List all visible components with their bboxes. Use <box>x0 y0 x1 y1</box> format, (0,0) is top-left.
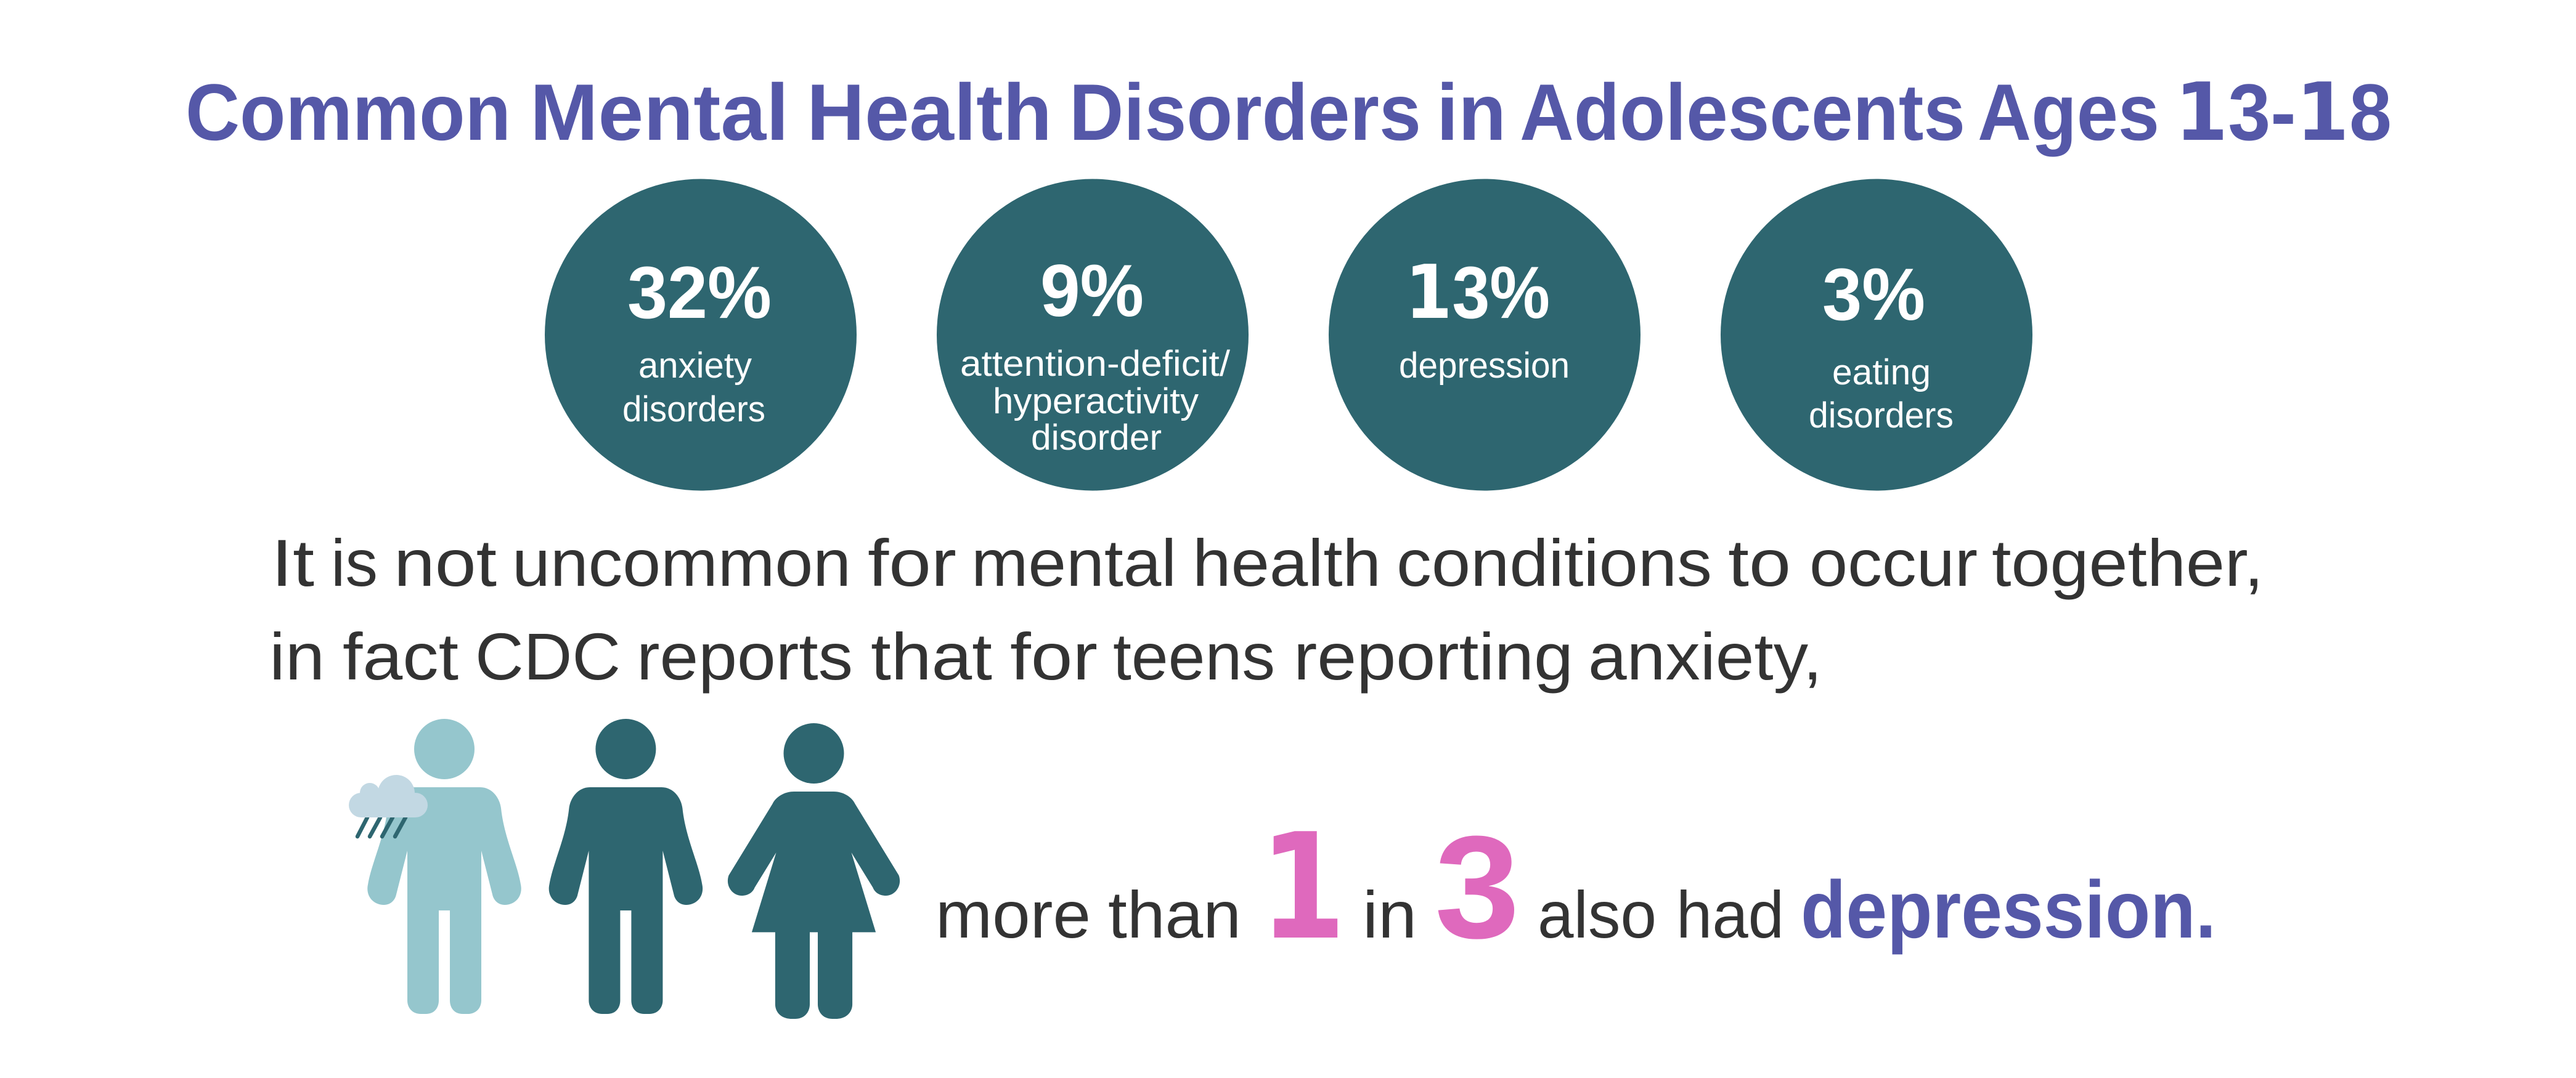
stat: 13% depression <box>1329 179 1641 490</box>
label: disorder <box>1031 418 1162 458</box>
figure: woman <box>728 723 900 1019</box>
value: 13% <box>1405 250 1550 336</box>
icon: rain cloud <box>349 775 428 837</box>
body text: health <box>1192 525 1381 600</box>
title: Mental <box>530 67 789 157</box>
body text: anxiety, <box>1588 619 1822 694</box>
body text: It <box>271 525 314 600</box>
label: anxiety <box>638 346 752 386</box>
title: 13-18 <box>2175 65 2392 159</box>
body text: CDC <box>475 619 621 694</box>
big number 3: 3 <box>1435 806 1520 969</box>
callout: more than 1 in 3 also had depression: in <box>1363 877 1417 952</box>
value: 3% <box>1822 253 1925 336</box>
callout: more than 1 in 3 also had depression <box>935 802 2216 972</box>
label: hyperactivity <box>993 381 1199 421</box>
stat: 3% eating disorders <box>1721 179 2032 490</box>
title: Ages <box>1978 67 2159 157</box>
callout: more than 1 in 3 also had depression: than <box>1108 877 1241 952</box>
label <box>960 344 1231 458</box>
label: attention-deficit/ <box>960 344 1231 384</box>
body text: to <box>1728 525 1791 600</box>
title: Disorders <box>1069 67 1421 157</box>
stat: 9% ADHD <box>937 179 1249 490</box>
circle <box>1329 179 1641 490</box>
label: disorders <box>622 389 765 429</box>
label: depression <box>1399 346 1570 386</box>
body text: reporting <box>1294 619 1573 694</box>
callout: more than 1 in 3 also had depression: had <box>1676 877 1784 952</box>
circle <box>1721 179 2032 490</box>
body text <box>269 525 2264 694</box>
label <box>622 346 765 429</box>
title <box>185 65 2392 159</box>
value: 32% <box>627 251 772 334</box>
body text: fact <box>343 619 459 694</box>
body text: mental <box>971 525 1176 600</box>
label: eating <box>1832 352 1931 392</box>
body text: conditions <box>1396 525 1712 600</box>
callout: more than 1 in 3 also had depression: more <box>935 877 1091 952</box>
title: Common <box>185 67 511 157</box>
body text: teens <box>1113 619 1275 694</box>
emphasized word: depression. <box>1801 864 2216 955</box>
body text: not <box>394 525 497 600</box>
label <box>1809 352 1954 436</box>
title: Adolescents <box>1520 67 1965 157</box>
value: 9% <box>1040 249 1144 332</box>
body text: in <box>269 619 325 694</box>
body text: reports <box>637 619 853 694</box>
figure: man <box>549 719 703 1014</box>
circle <box>545 179 857 490</box>
body text: together, <box>1992 525 2264 600</box>
big number 1: 1 <box>1260 802 1346 972</box>
title: Health <box>807 67 1052 157</box>
circle <box>937 179 1249 490</box>
body text: uncommon <box>512 525 851 600</box>
callout: more than 1 in 3 also had depression: also <box>1538 877 1657 952</box>
stat: 32% anxiety disorders <box>545 179 857 490</box>
body text: occur <box>1809 525 1978 600</box>
title: in <box>1437 67 1506 157</box>
label: disorders <box>1809 395 1954 436</box>
body text: for <box>868 525 956 600</box>
body text: for <box>1010 619 1098 694</box>
figure: person with depression <box>367 719 521 1014</box>
body text: that <box>871 619 992 694</box>
body text: is <box>331 525 378 600</box>
